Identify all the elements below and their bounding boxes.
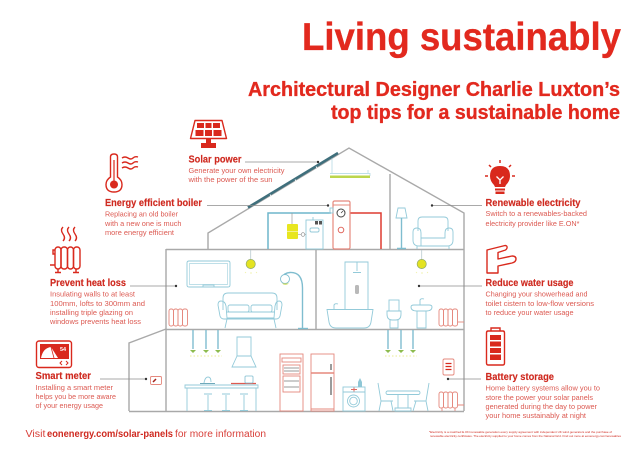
- icon: tap: [487, 246, 516, 273]
- website footer line: [26, 429, 266, 440]
- ovens: [280, 354, 303, 411]
- text: reduce water usage: [486, 278, 594, 317]
- text: battery storage: generated during the day to power: [486, 402, 597, 411]
- kitchen downlights right: [385, 330, 417, 356]
- yellow expansion vessel: [287, 213, 306, 239]
- battery unit on wall: [443, 359, 454, 375]
- loft ceiling light: [330, 158, 370, 178]
- subtitle: [248, 79, 620, 124]
- text: prevent heat loss: installing triple glazing on: [50, 308, 133, 317]
- arc floor lamp: [280, 272, 308, 328]
- cooker hood: [232, 337, 256, 367]
- icon: thermometer with heat waves: [106, 154, 138, 192]
- icon: smart meter display: 54: [60, 347, 67, 353]
- footnote: [429, 430, 621, 438]
- smart meter device in house: [150, 376, 162, 384]
- text: smart meter: of your energy usage: [36, 401, 103, 410]
- text: energy efficient boiler: more energy efficient: [105, 228, 175, 237]
- hot water tank: [330, 201, 350, 249]
- text: renewable electricity: Renewable electricity: [486, 198, 581, 209]
- boiler: [306, 217, 323, 249]
- text: energy efficient boiler: [104, 198, 202, 237]
- text: reduce water usage: Changing your showerhead and: [486, 290, 588, 298]
- text: solar power: [187, 154, 285, 184]
- website footer line: eonenergy.com/solar-panels: [47, 429, 173, 440]
- icon: solar panel: [190, 120, 226, 148]
- text: smart meter: helps you be more aware: [36, 392, 116, 401]
- text: solar power: Generate your own electricity: [188, 166, 285, 175]
- text: battery storage: your home sustainably at night: [486, 411, 587, 420]
- footnote: *Electricity is a matched E.ON renewable generation every supply agreement with independent UK wind generators and the purchase of: [429, 430, 612, 434]
- text: reduce water usage: toilet cistern to low-flow versions: [486, 299, 594, 308]
- icon: battery: [486, 328, 504, 365]
- website footer line: Visit: [26, 429, 46, 440]
- text: battery storage: Battery storage: [486, 372, 554, 383]
- text: renewable electricity: Switch to a renewables-backed: [486, 209, 587, 218]
- text: reduce water usage: to reduce your water usage: [486, 308, 574, 317]
- website footer line: for more information: [175, 429, 266, 440]
- kitchen downlights left: [190, 330, 222, 356]
- shower and bath: [327, 262, 373, 328]
- bathroom radiator: [439, 309, 464, 326]
- television: [187, 261, 230, 287]
- living room pendant light: [245, 250, 257, 274]
- house structure: [129, 148, 464, 412]
- kitchen radiator: [439, 392, 464, 411]
- text: reduce water usage: Reduce water usage: [486, 278, 574, 289]
- icon: radiator with heat: [50, 227, 80, 272]
- living room radiator: [169, 309, 188, 326]
- toilet: [387, 300, 401, 328]
- text: energy efficient boiler: Energy efficient boiler: [105, 198, 202, 209]
- leader lines: [100, 161, 482, 380]
- text: battery storage: Home battery systems allow you to: [486, 384, 600, 392]
- text: prevent heat loss: [49, 278, 145, 326]
- text: battery storage: [486, 372, 600, 420]
- text: energy efficient boiler: Replacing an old boiler: [105, 210, 178, 218]
- icon: light bulb: [485, 160, 515, 194]
- text: energy efficient boiler: with a new one is much: [104, 219, 182, 228]
- fridge freezer: [311, 354, 334, 411]
- text: prevent heat loss: windows prevents heat loss: [49, 317, 141, 326]
- text: renewable electricity: electricity provider like E.ON*: [486, 219, 580, 228]
- kitchen island with stools: [185, 376, 258, 411]
- text: renewable electricity: [486, 198, 587, 228]
- sofa: [218, 293, 282, 328]
- text: prevent heat loss: Insulating walls to at least: [50, 290, 136, 298]
- text: solar power: Solar power: [188, 154, 242, 166]
- text: solar power: with the power of the sun: [187, 175, 272, 184]
- title: Living sustainably: [302, 16, 621, 59]
- armchair: [413, 217, 453, 249]
- footnote: renewable electricity certificates. The electricity supplied to your home comes from the National Grid. Find out more at eonenergy.com/renewables: [430, 434, 621, 438]
- loft floor lamp: [396, 208, 407, 248]
- text: smart meter: [36, 371, 116, 410]
- heating pipes: [268, 213, 381, 249]
- icon: smart meter display: [36, 341, 72, 368]
- text: prevent heat loss: 100mm, lofts to 300mm and: [50, 299, 145, 308]
- washing machine: [343, 378, 365, 411]
- bathroom pendant light: [416, 250, 428, 274]
- text: smart meter: Smart meter: [36, 371, 91, 382]
- dining table and chairs: [378, 383, 429, 411]
- solar panels on roof: [248, 153, 338, 208]
- text: battery storage: store the power your solar panels: [486, 393, 593, 402]
- subtitle: Architectural Designer Charlie Luxton’s: [248, 79, 620, 101]
- subtitle: top tips for a sustainable home: [331, 102, 620, 124]
- sink: [411, 299, 432, 328]
- text: prevent heat loss: Prevent heat loss: [50, 278, 126, 289]
- text: smart meter: Installing a smart meter: [36, 383, 113, 392]
